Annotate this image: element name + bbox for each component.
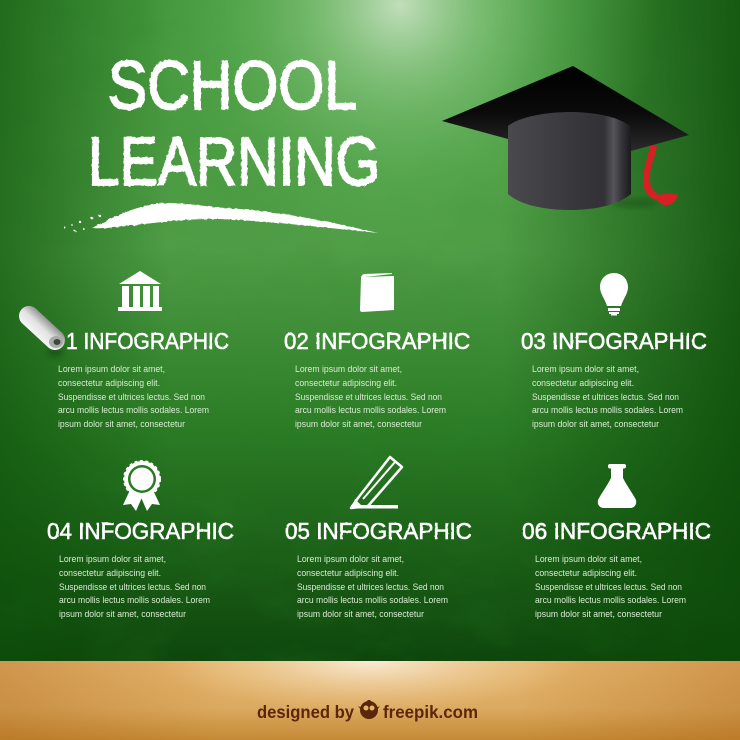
- text 06: Lorem ipsum dolor sit amet,: [535, 554, 642, 564]
- text 03: Lorem ipsum dolor sit amet,: [532, 364, 639, 374]
- text 04: consectetur adipiscing elit.: [59, 568, 161, 578]
- tassel: [643, 146, 678, 205]
- chalk underline: [64, 203, 378, 233]
- text 02: ipsum dolor sit amet, consectetur: [295, 419, 422, 429]
- text 02: arcu mollis lectus mollis sodales. Lorem: [295, 405, 446, 415]
- text 06: arcu mollis lectus mollis sodales. Lorem: [535, 595, 686, 605]
- title: SCHOOL: [108, 47, 357, 124]
- text 03: consectetur adipiscing elit.: [532, 378, 634, 388]
- text 01: [58, 364, 209, 429]
- text 03: ipsum dolor sit amet, consectetur: [532, 419, 659, 429]
- item 04: [47, 461, 234, 619]
- heading 02: 02 INFOGRAPHIC: [284, 328, 470, 354]
- text 05: [297, 554, 448, 619]
- title: LEARNING: [88, 123, 380, 200]
- text 03: [532, 364, 683, 429]
- item 03: [521, 273, 707, 429]
- text 06: consectetur adipiscing elit.: [535, 568, 637, 578]
- credit text left: designed by: [257, 702, 354, 722]
- text 02: [295, 364, 446, 429]
- heading 03: 03 INFOGRAPHIC: [521, 328, 707, 354]
- text 01: ipsum dolor sit amet, consectetur: [58, 419, 185, 429]
- heading 01: 1 INFOGRAPHIC: [66, 328, 229, 354]
- icon: award rosette: [123, 461, 160, 511]
- cap shadow: [613, 199, 657, 207]
- item 02: [284, 273, 470, 429]
- icon: light bulb: [600, 273, 628, 316]
- text 04: Lorem ipsum dolor sit amet,: [59, 554, 166, 564]
- text 05: Suspendisse et ultrices lectus. Sed non: [297, 582, 444, 592]
- text 06: ipsum dolor sit amet, consectetur: [535, 609, 662, 619]
- icon: book: [360, 273, 394, 312]
- text 04: Suspendisse et ultrices lectus. Sed non: [59, 582, 206, 592]
- text 03: arcu mollis lectus mollis sodales. Lorem: [532, 405, 683, 415]
- text 05: ipsum dolor sit amet, consectetur: [297, 609, 424, 619]
- text 05: consectetur adipiscing elit.: [297, 568, 399, 578]
- icon: freepik logo: [358, 700, 380, 719]
- credit text right: freepik.com: [383, 702, 478, 722]
- text 01: arcu mollis lectus mollis sodales. Lorem: [58, 405, 209, 415]
- heading 04: 04 INFOGRAPHIC: [47, 518, 234, 544]
- graduation cap: [442, 66, 689, 210]
- chalk stick: [29, 316, 63, 357]
- text 04: [59, 554, 210, 619]
- text 04: ipsum dolor sit amet, consectetur: [59, 609, 186, 619]
- text 02: Suspendisse et ultrices lectus. Sed non: [295, 392, 442, 402]
- text 06: Suspendisse et ultrices lectus. Sed non: [535, 582, 682, 592]
- text 02: Lorem ipsum dolor sit amet,: [295, 364, 402, 374]
- text 03: Suspendisse et ultrices lectus. Sed non: [532, 392, 679, 402]
- item 05: [285, 457, 472, 619]
- text 02: consectetur adipiscing elit.: [295, 378, 397, 388]
- heading 05: 05 INFOGRAPHIC: [285, 518, 472, 544]
- heading 06: 06 INFOGRAPHIC: [522, 518, 711, 544]
- text 01: Suspendisse et ultrices lectus. Sed non: [58, 392, 205, 402]
- item 06: [522, 464, 711, 619]
- icon: museum: [118, 271, 162, 311]
- icon: pencil: [351, 457, 402, 509]
- icon: flask: [598, 464, 636, 508]
- text 01: Lorem ipsum dolor sit amet,: [58, 364, 165, 374]
- text 06: [535, 554, 686, 619]
- item 01: [58, 271, 229, 429]
- text 01: consectetur adipiscing elit.: [58, 378, 160, 388]
- text 04: arcu mollis lectus mollis sodales. Lorem: [59, 595, 210, 605]
- title: [88, 47, 380, 200]
- wooden ledge: [0, 661, 740, 740]
- mortarboard: [442, 66, 689, 151]
- footer credit: [257, 700, 478, 722]
- cap body: [508, 112, 631, 210]
- text 05: Lorem ipsum dolor sit amet,: [297, 554, 404, 564]
- text 05: arcu mollis lectus mollis sodales. Lorem: [297, 595, 448, 605]
